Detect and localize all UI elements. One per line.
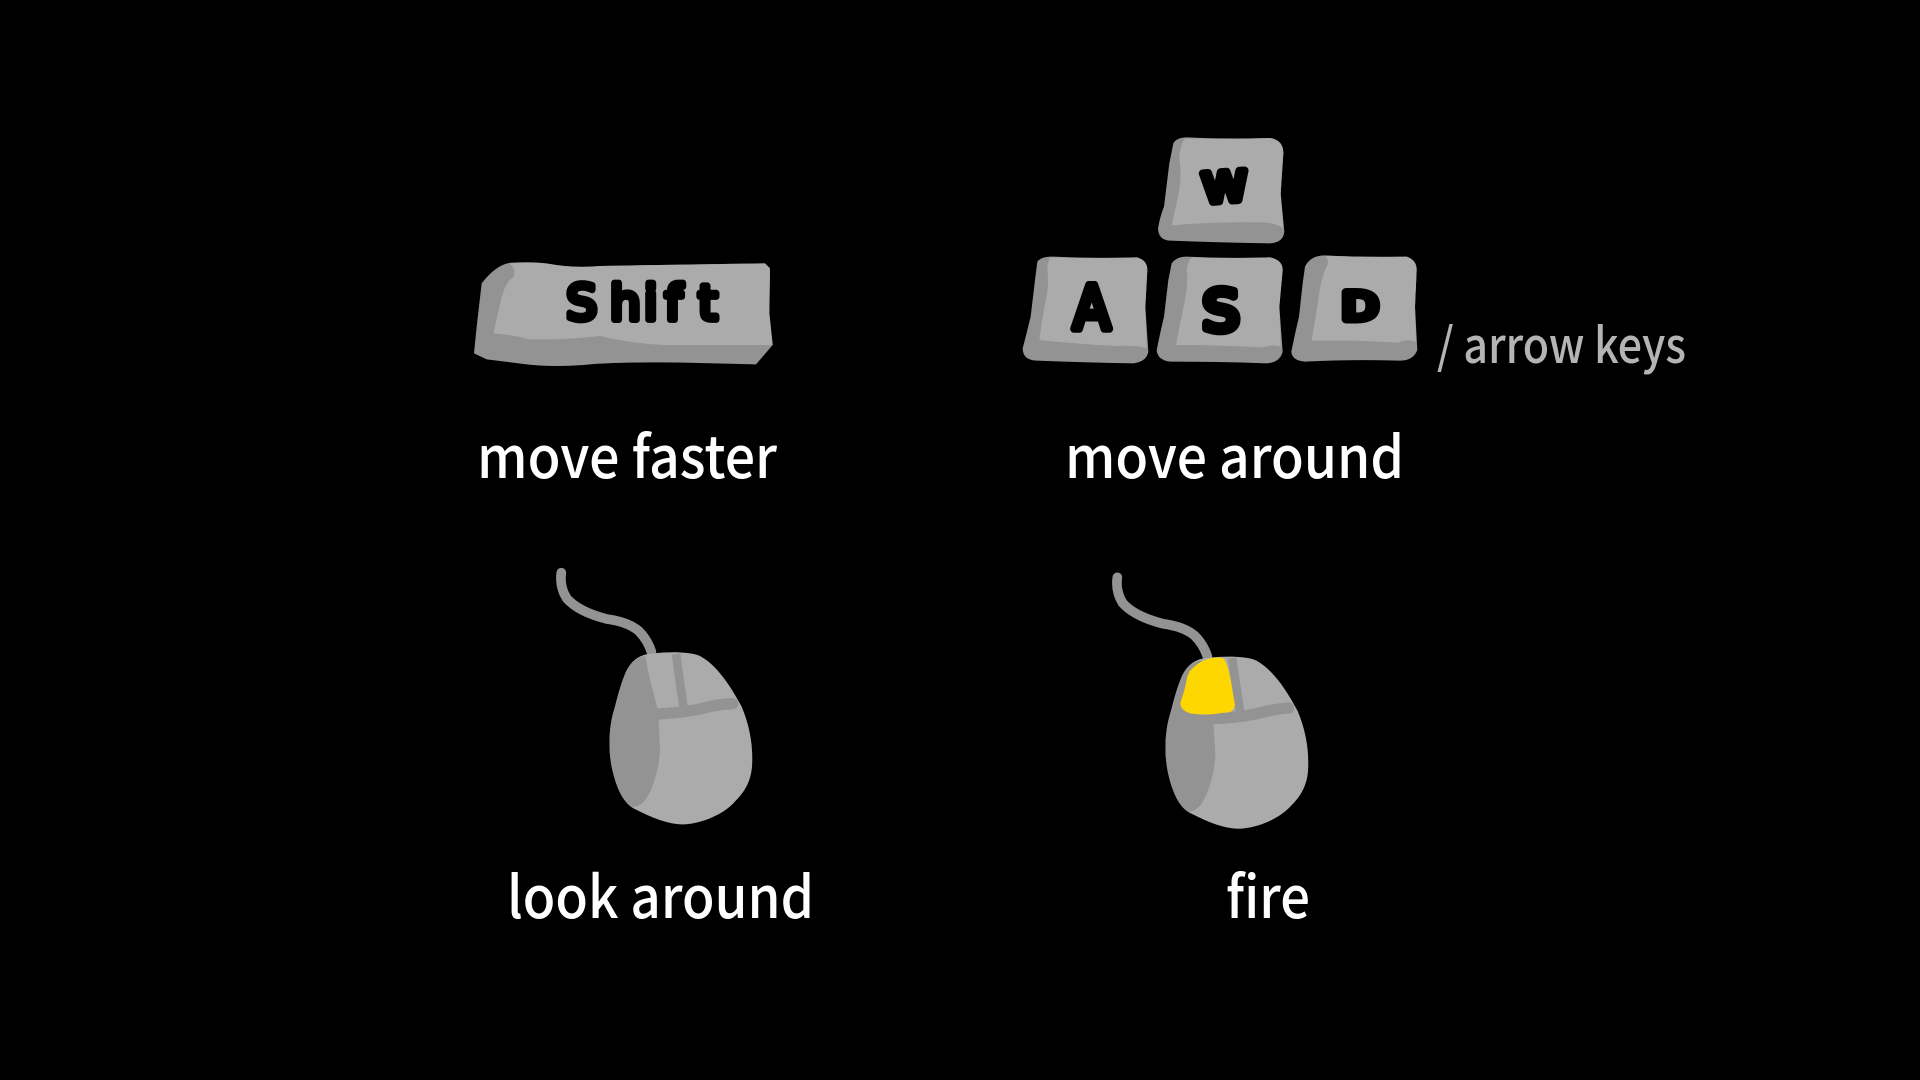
mouse buttons divider bbox=[1232, 658, 1240, 712]
icon: W key bbox=[1023, 137, 1417, 363]
icon: mouse, look around bbox=[561, 573, 752, 824]
key label: W: W bbox=[1201, 164, 1248, 212]
text: arrow keys: / arrow keys bbox=[1437, 307, 1686, 378]
mouse cable bbox=[561, 573, 651, 652]
label: fire: fire bbox=[1226, 851, 1310, 935]
key label: Shift: Shift bbox=[566, 275, 717, 331]
key label: S: S bbox=[1203, 279, 1239, 343]
mouse buttons divider bbox=[676, 654, 683, 707]
label: move around: move around bbox=[1065, 411, 1404, 495]
icon: A key bbox=[1023, 257, 1148, 363]
label: look around: look around bbox=[507, 851, 814, 935]
highlighted left button bbox=[1180, 657, 1235, 715]
icon: mouse, fire bbox=[1117, 577, 1308, 829]
key label: D: D bbox=[1342, 284, 1378, 328]
key label: A: A bbox=[1073, 274, 1110, 343]
label: move faster: move faster bbox=[477, 411, 777, 495]
mouse cable bbox=[1117, 577, 1207, 656]
icon: D key bbox=[1291, 255, 1417, 362]
icon: S key bbox=[1157, 257, 1283, 363]
icon: Shift key bbox=[474, 262, 773, 366]
